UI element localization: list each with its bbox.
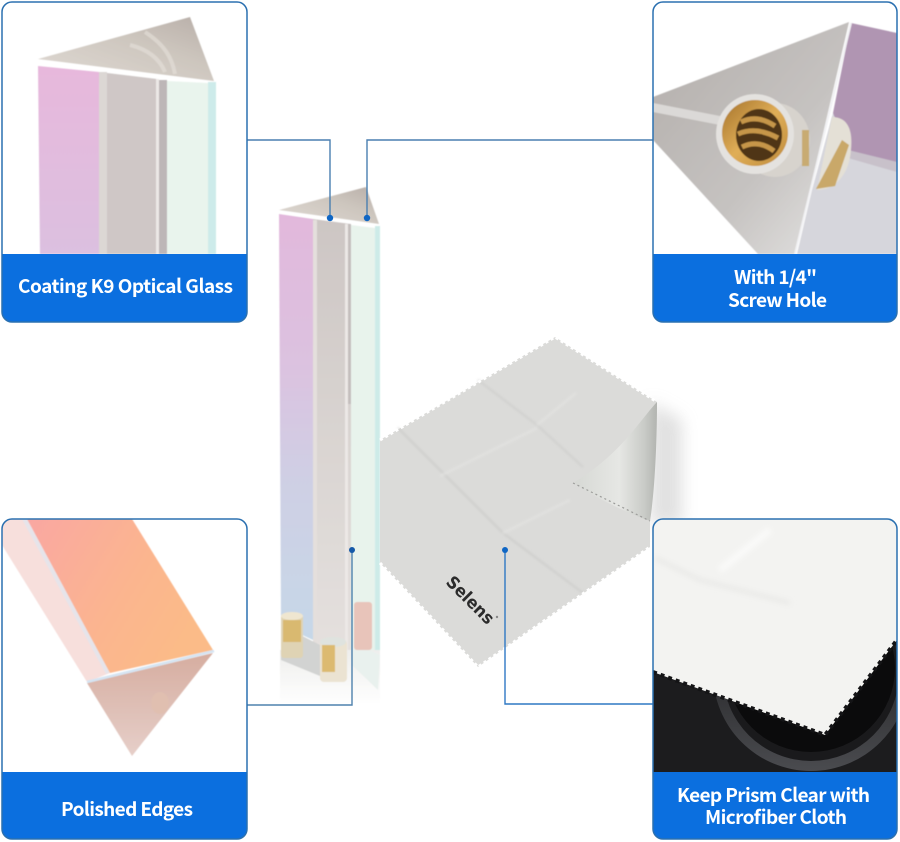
reflected screw [354, 602, 372, 650]
cloth serrated edges [380, 337, 657, 440]
panel: polished edges [2, 519, 247, 840]
connector: bottom right panel to cloth [502, 547, 653, 704]
caption: Microfiber Cloth [705, 803, 847, 830]
caption: Coating K9 Optical Glass [18, 272, 233, 299]
icon: brass screw insert [716, 94, 810, 177]
photo: prism base close-up [653, 22, 897, 254]
cloth logo: Selens [441, 572, 498, 629]
brass screw left [281, 612, 303, 658]
brass screw right [320, 637, 347, 682]
panel: microfiber cloth [653, 519, 900, 840]
panel: screw hole [653, 2, 897, 322]
photo: prism top close-up [38, 17, 216, 254]
green coated face [351, 225, 375, 650]
lens ring [716, 646, 896, 771]
connector: top left panel to prism [247, 140, 333, 221]
connector: bottom left panel to prism [247, 547, 355, 705]
connector: top right panel to prism [364, 140, 653, 221]
photo: main prism [279, 187, 380, 705]
caption: Keep Prism Clear with [677, 781, 870, 808]
pink coated face [279, 214, 313, 640]
caption: Screw Hole [728, 286, 827, 313]
caption band [2, 772, 247, 840]
icon: reflected screw [816, 117, 851, 190]
prism base and floor [280, 650, 380, 705]
cloth body [380, 337, 657, 667]
cloth shadow [650, 402, 682, 525]
cloth creases [398, 380, 583, 593]
photo: cloth on lens [653, 519, 900, 774]
grey coated face [313, 219, 351, 680]
photo: prism end close-up [2, 519, 214, 756]
caption [728, 263, 827, 313]
caption band [653, 772, 897, 840]
caption band [653, 254, 897, 322]
photo: microfiber cloth [380, 337, 682, 667]
caption band [2, 254, 247, 322]
caption [677, 781, 870, 830]
caption: Polished Edges [61, 795, 193, 822]
cloth folded corner [573, 402, 657, 521]
prism top face [279, 187, 379, 224]
panel: coating K9 optical glass [2, 2, 247, 322]
white cloth [653, 519, 897, 735]
caption: With 1/4" [734, 263, 817, 290]
